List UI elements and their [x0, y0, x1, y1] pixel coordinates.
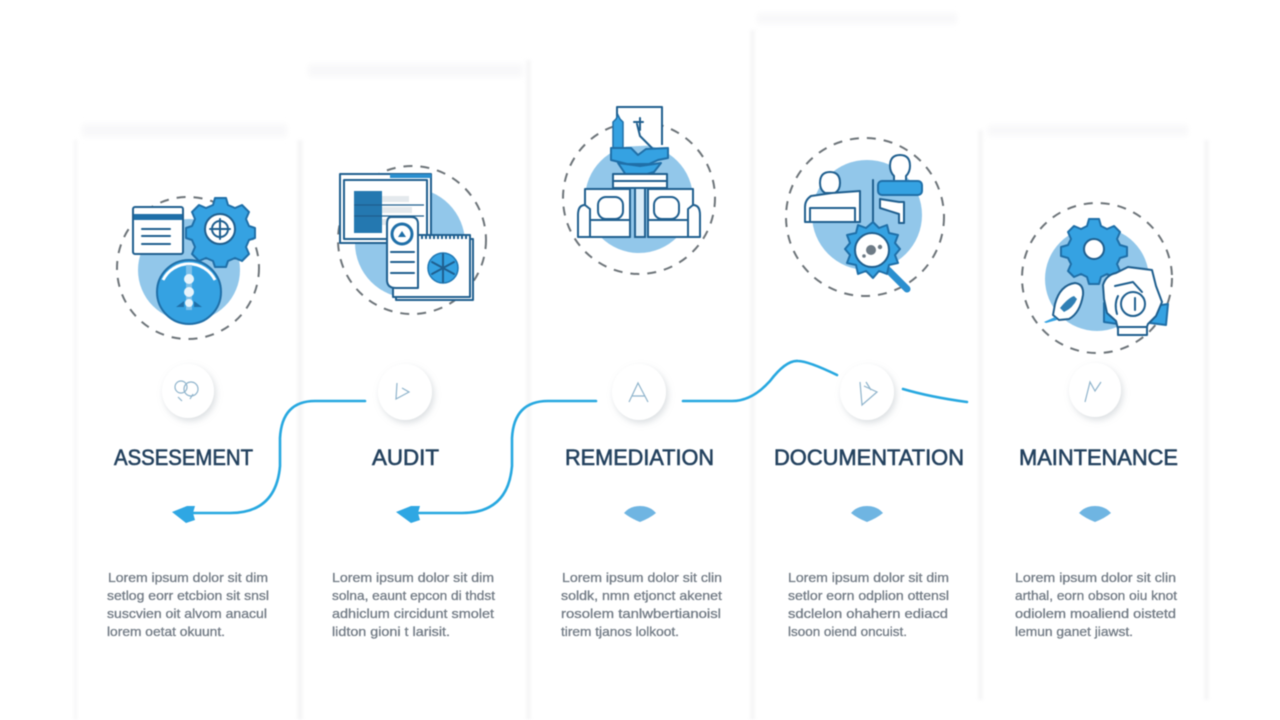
icon: gear with brain [186, 198, 255, 267]
text block: maintenance [1015, 570, 1177, 639]
text block: documentation: Lorem ipsum dolor sit dim [788, 570, 949, 585]
text block: maintenance: arthal, eorn obson oiu knot [1015, 588, 1177, 603]
icon: node documentation [840, 364, 894, 420]
icon: gear [1061, 219, 1127, 284]
icon: person at desk [805, 172, 860, 222]
arrow: audit [396, 506, 420, 523]
text block: audit [332, 570, 495, 639]
text block: remediation: tirem tjanos lolkoot. [561, 624, 679, 639]
panel: documentation icon [786, 138, 944, 296]
text block: audit: Lorem ipsum dolor sit dim [332, 570, 494, 585]
icon: node remediation [612, 364, 666, 420]
text block: assessment: Lorem ipsum dolor sit dim [108, 570, 268, 585]
icon: node maintenance [1069, 363, 1121, 417]
icon: rocket in circle [157, 260, 221, 324]
heading: documentation: DOCUMENTATION [774, 445, 964, 470]
text block: audit: lidton gioni t larisit. [332, 624, 450, 639]
panel: audit icon [338, 166, 486, 314]
icon: badge with magnifier [845, 222, 907, 289]
text block: assessment [107, 570, 269, 639]
icon: document [387, 217, 418, 288]
text block: documentation: setlor eorn odplion ottensl [788, 588, 949, 603]
icon: divider and seats [578, 188, 700, 237]
text block: remediation [561, 570, 722, 639]
icon: person with nameplate [873, 155, 922, 225]
icon: monitor with table [340, 174, 431, 243]
text block: remediation: Lorem ipsum dolor sit clin [562, 570, 722, 585]
icon: calendar with brain [393, 235, 473, 300]
text block: maintenance: Lorem ipsum dolor sit clin [1015, 570, 1176, 585]
icon: browser window [133, 207, 183, 254]
icon: picture frame and desk [611, 107, 668, 188]
icon: remediation marker [624, 506, 656, 522]
arrow: assessment [172, 506, 195, 523]
panel: remediation icon [563, 107, 715, 274]
panel: assessment icon [117, 197, 259, 339]
text block: documentation: sdclelon ohahern ediacd [788, 606, 948, 621]
text block: assessment: setlog eorr etcbion sit snsl [107, 588, 269, 603]
text block: audit: solna, eaunt epcon di thdst [332, 588, 495, 603]
text block: audit: adhiclum circidunt smolet [332, 606, 494, 621]
text block: assessment: suscvien oit alvom anacul [107, 606, 267, 621]
text block: documentation: lsoon oiend oncuist. [788, 624, 907, 639]
panel: card top shadows [82, 13, 1188, 137]
text block: documentation [788, 570, 949, 639]
heading: remediation: REMEDIATION [565, 445, 714, 470]
heading: assessment: ASSESEMENT [114, 445, 253, 470]
panel: maintenance icon [1022, 203, 1172, 353]
text block: maintenance: odiolem moaliend oistetd [1015, 606, 1176, 621]
icon: maintenance marker [1079, 506, 1111, 522]
icon: node audit [378, 364, 432, 420]
icon: node assessment [162, 364, 214, 418]
icon: head with hand [1103, 267, 1168, 335]
text block: maintenance: lemun ganet jiawst. [1015, 624, 1133, 639]
heading: maintenance: MAINTENANCE [1019, 445, 1178, 470]
text block: assessment: lorem oetat okuunt. [107, 624, 225, 639]
text block: remediation: rosolem tanlwbertianoisl [561, 606, 721, 621]
text block: remediation: soldk, nmn etjonct akenet [561, 588, 722, 603]
icon: documentation marker [851, 506, 883, 522]
chart: connector lines [190, 361, 967, 513]
heading: audit: AUDIT [372, 445, 439, 470]
icon: ear [1044, 283, 1083, 323]
